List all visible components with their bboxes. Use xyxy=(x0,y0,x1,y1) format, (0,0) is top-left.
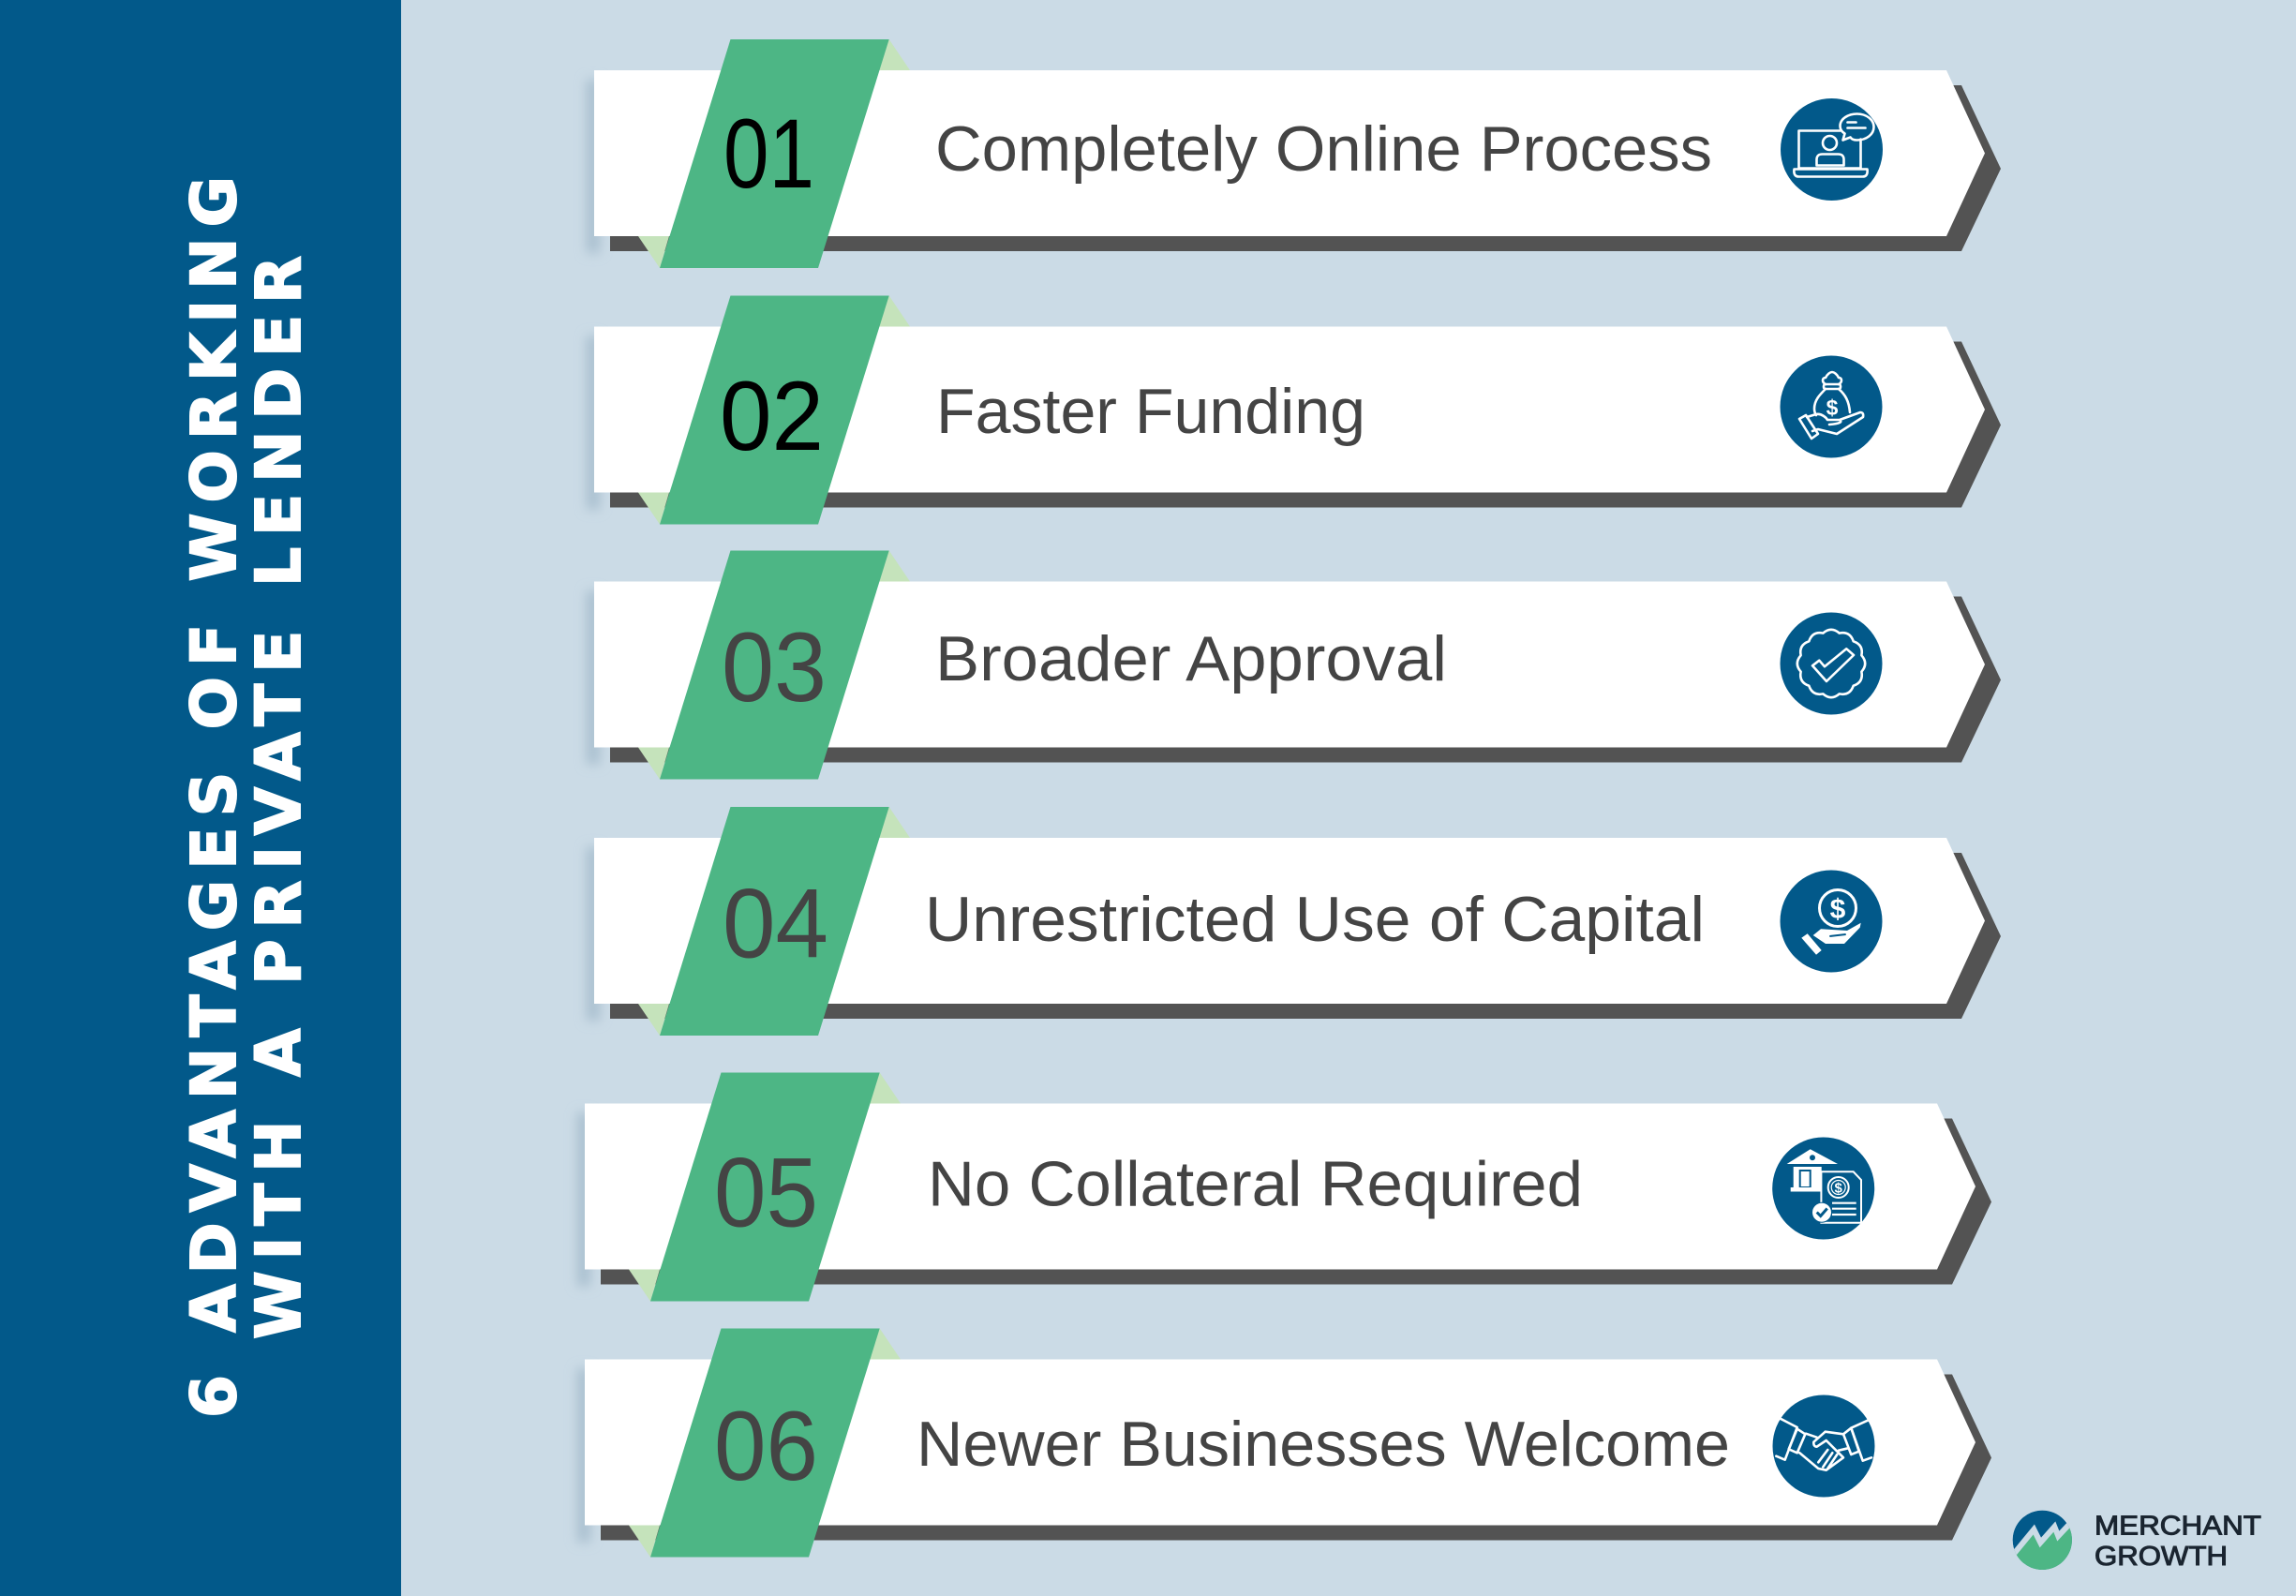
logo wordmark: MERCHANT xyxy=(2095,1511,2261,1541)
logo: Merchant Growth: GROWTH xyxy=(2095,1542,2228,1572)
icon: bank and document with check xyxy=(1772,1138,1874,1239)
label: Faster Funding: Faster Funding xyxy=(936,376,1365,447)
label: Broader Approval: Broader Approval xyxy=(935,623,1447,694)
banner 06 xyxy=(577,1329,1991,1558)
icon: hand holding money bag: $ xyxy=(1826,395,1839,420)
banner 02 xyxy=(587,296,2001,525)
number 05: 05 xyxy=(714,1138,818,1248)
icon: bank and document with check: $ xyxy=(1835,1181,1843,1196)
banner 03 xyxy=(587,551,2001,780)
logo: Merchant Growth xyxy=(2009,1511,2261,1574)
icon: badge with check mark xyxy=(1781,613,1882,714)
icon: handshake xyxy=(1773,1395,1874,1498)
number 01: 01 xyxy=(723,99,814,209)
title line 2: WITH A PRIVATE LENDER xyxy=(243,256,315,1339)
title line 1: 6 ADVANTAGES OF WORKING xyxy=(178,176,250,1418)
left title panel xyxy=(0,0,401,1596)
label: Unrestricted Use of Capital: Unrestricted Use of Capital xyxy=(925,884,1705,955)
logo mark xyxy=(2013,1511,2072,1570)
number 03: 03 xyxy=(722,613,827,723)
banner 04 xyxy=(587,807,2001,1036)
number 04: 04 xyxy=(723,870,828,978)
banner 05 xyxy=(577,1072,1991,1301)
label: Newer Businesses Welcome: Newer Businesses Welcome xyxy=(917,1409,1730,1480)
label: No Collateral Required: No Collateral Required xyxy=(928,1149,1583,1220)
number 06: 06 xyxy=(714,1392,818,1501)
label: Completely Online Process: Completely Online Process xyxy=(935,113,1712,185)
icon: hand holding dollar coin xyxy=(1781,870,1882,973)
icon: laptop with person and chat bubble xyxy=(1781,98,1883,201)
icon: hand holding money bag xyxy=(1781,356,1882,457)
banner 01 xyxy=(587,39,2001,268)
icon: hand holding dollar coin: $ xyxy=(1830,894,1846,925)
number 02: 02 xyxy=(720,362,824,471)
